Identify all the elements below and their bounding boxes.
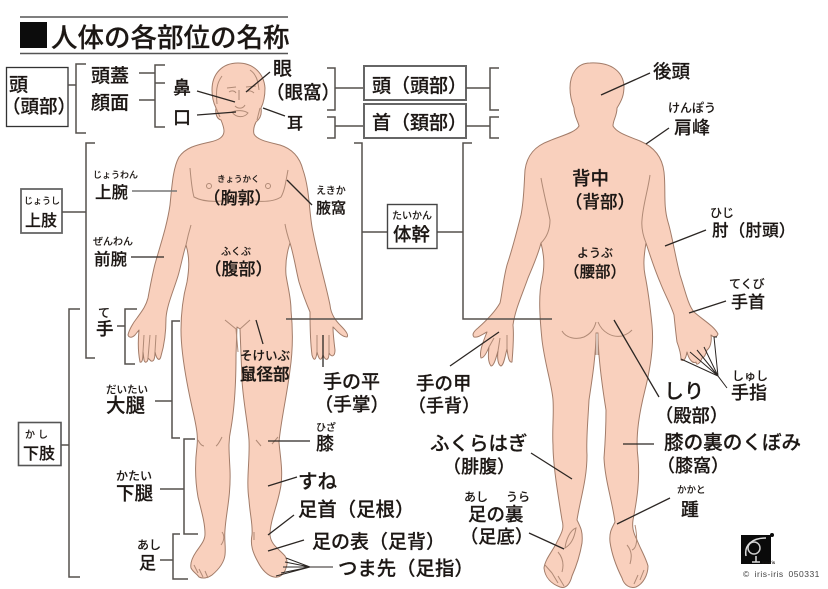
logo: © iris-iris 050331 xyxy=(743,569,820,579)
brackets: right head and neck connectors xyxy=(466,68,499,138)
logo: iris-iris xyxy=(762,560,776,565)
panel: head box xyxy=(2,68,76,126)
logo xyxy=(741,533,820,579)
upper limb bracket xyxy=(62,143,95,358)
box: upper limb xyxy=(21,189,62,233)
label: knee: 膝 xyxy=(316,434,334,454)
label: back of knee xyxy=(623,432,801,476)
label: buttocks xyxy=(614,320,728,426)
label: eye xyxy=(246,59,340,103)
label: back: 背中 xyxy=(572,168,609,189)
label: sole: あし xyxy=(464,490,488,504)
label: forearm xyxy=(93,236,164,269)
box: lower limb: かし xyxy=(25,429,51,441)
label: forearm: 前腕 xyxy=(94,250,127,269)
label: abdomen: ふくぶ xyxy=(221,246,251,258)
label: groin xyxy=(240,320,291,384)
title: 人体の各部位の名称 xyxy=(51,23,290,53)
label: elbow: ひじ xyxy=(710,206,734,220)
label: hand: 手 xyxy=(96,319,114,339)
label: back of knee: （膝窩） xyxy=(657,456,729,476)
label: sole: 足の裏 xyxy=(468,504,524,525)
label: skull and face: 顔面 xyxy=(91,92,129,114)
label: buttocks: （殿部） xyxy=(655,405,728,426)
panel: head box: 頭 xyxy=(9,75,28,96)
label: acromion: 肩峰 xyxy=(674,118,710,138)
label: mouth: 口 xyxy=(173,108,191,128)
box: neck center xyxy=(364,104,467,138)
label: lower back: （腰部） xyxy=(564,263,626,281)
box: trunk: たいかん xyxy=(392,210,432,222)
label: acromion xyxy=(646,101,716,144)
label: armpit xyxy=(287,180,346,217)
label: knee xyxy=(268,421,336,454)
label: sole: うら xyxy=(506,490,530,504)
label: abdomen: （腹部） xyxy=(204,260,272,279)
label: back of hand xyxy=(408,332,499,416)
label: armpit: えきか xyxy=(316,185,346,197)
label: back of knee: 膝の裏のくぼみ xyxy=(664,432,801,454)
label: knee: ひざ xyxy=(316,421,336,434)
trunk brackets xyxy=(286,143,552,319)
label: fingers: しゅし xyxy=(732,369,768,383)
panel: head box: （頭部） xyxy=(2,96,76,117)
label: buttocks: しり xyxy=(664,381,704,403)
label: hand: て xyxy=(98,306,110,320)
label: lower leg: かたい xyxy=(116,469,152,483)
label: thigh xyxy=(106,321,180,438)
label: wrist: てくび xyxy=(729,277,765,291)
label: elbow: 肘（肘頭） xyxy=(712,221,795,240)
label: toes: つま先（足指） xyxy=(338,558,474,580)
label: skull and face: 頭蓋 xyxy=(91,65,129,87)
label: calf: （腓腹） xyxy=(443,456,515,477)
label: eye: 眼 xyxy=(273,59,292,80)
label: fingers xyxy=(681,337,768,403)
label: calf xyxy=(430,433,572,479)
label: wrist: 手首 xyxy=(731,293,765,312)
label: lower leg: 下腿 xyxy=(116,483,154,504)
label: calf: ふくらはぎ xyxy=(430,433,528,455)
label: lower back xyxy=(564,246,626,281)
box: head center xyxy=(364,66,467,100)
box: trunk: 体幹 xyxy=(393,224,431,245)
label: nose: 鼻 xyxy=(173,77,191,98)
label: abdomen xyxy=(204,246,272,279)
face bracket xyxy=(139,65,165,127)
label: chest: きょうかく xyxy=(217,174,260,184)
label: forearm: ぜんわん xyxy=(93,236,133,248)
label: top of foot: 足の表（足背） xyxy=(312,531,445,553)
label: palm: 手の平 xyxy=(323,371,380,393)
back body figure xyxy=(473,63,718,588)
label: chest: （胸郭） xyxy=(204,189,272,208)
label: foot: 足 xyxy=(139,554,156,573)
label: fingers: 手指 xyxy=(731,383,767,403)
label: lower back: ようぶ xyxy=(577,246,613,260)
label: foot xyxy=(137,534,188,579)
label: shin xyxy=(268,471,338,493)
label: groin: そけいぶ xyxy=(240,349,291,363)
label: hand xyxy=(96,306,137,364)
label: heel: 踵 xyxy=(681,500,699,520)
box: trunk xyxy=(388,204,437,248)
label: heel: かかと xyxy=(677,485,706,496)
label: heel xyxy=(617,485,706,524)
box: lower limb xyxy=(18,422,61,466)
label: upper arm: 上腕 xyxy=(95,183,128,202)
brackets: left head and neck connectors xyxy=(327,68,364,138)
label: wrist xyxy=(689,277,765,313)
label: palm xyxy=(314,335,389,415)
label: palm: （手掌） xyxy=(314,394,389,415)
label: thigh: だいたい xyxy=(106,384,148,396)
box: upper limb: じょうし xyxy=(24,196,60,206)
label: back: （背部） xyxy=(565,192,635,212)
label: ear xyxy=(263,108,303,133)
label: ankle: 足首（足根） xyxy=(298,499,414,521)
label: back xyxy=(565,168,635,212)
label: back of head xyxy=(601,61,691,95)
label: toes xyxy=(276,558,474,580)
head bracket xyxy=(68,64,86,133)
label: back of head: 後頭 xyxy=(653,61,691,82)
lower limb bracket xyxy=(61,309,80,577)
label: upper arm xyxy=(93,170,177,202)
label: sole: （足底） xyxy=(460,526,533,547)
label: nose xyxy=(173,77,235,102)
label: sole xyxy=(460,490,564,549)
label: ankle xyxy=(268,499,414,535)
label: armpit: 腋窩 xyxy=(316,199,346,217)
label: ear: 耳 xyxy=(287,116,303,133)
label: skull and face xyxy=(91,65,129,114)
label: chest xyxy=(204,174,272,208)
label: back of hand: 手の甲 xyxy=(416,373,472,394)
label: foot: あし xyxy=(137,538,161,552)
box: upper limb: 上肢 xyxy=(25,212,57,230)
label: thigh: 大腿 xyxy=(106,395,146,417)
label: groin: 鼠径部 xyxy=(240,365,290,384)
label: upper arm: じょうわん xyxy=(93,170,138,180)
box: neck center: 首（頚部） xyxy=(372,112,467,134)
label: back of hand: （手背） xyxy=(408,396,480,416)
box: head center: 頭（頭部） xyxy=(372,75,467,97)
box: lower limb: 下肢 xyxy=(23,445,55,463)
label: shin: すね xyxy=(298,471,338,493)
label: acromion: けんぽう xyxy=(668,101,716,115)
label: elbow xyxy=(665,206,795,246)
front body figure xyxy=(128,63,348,578)
label: eye: （眼窩） xyxy=(266,82,340,103)
label: lower leg xyxy=(116,439,198,534)
label: mouth xyxy=(173,108,236,128)
